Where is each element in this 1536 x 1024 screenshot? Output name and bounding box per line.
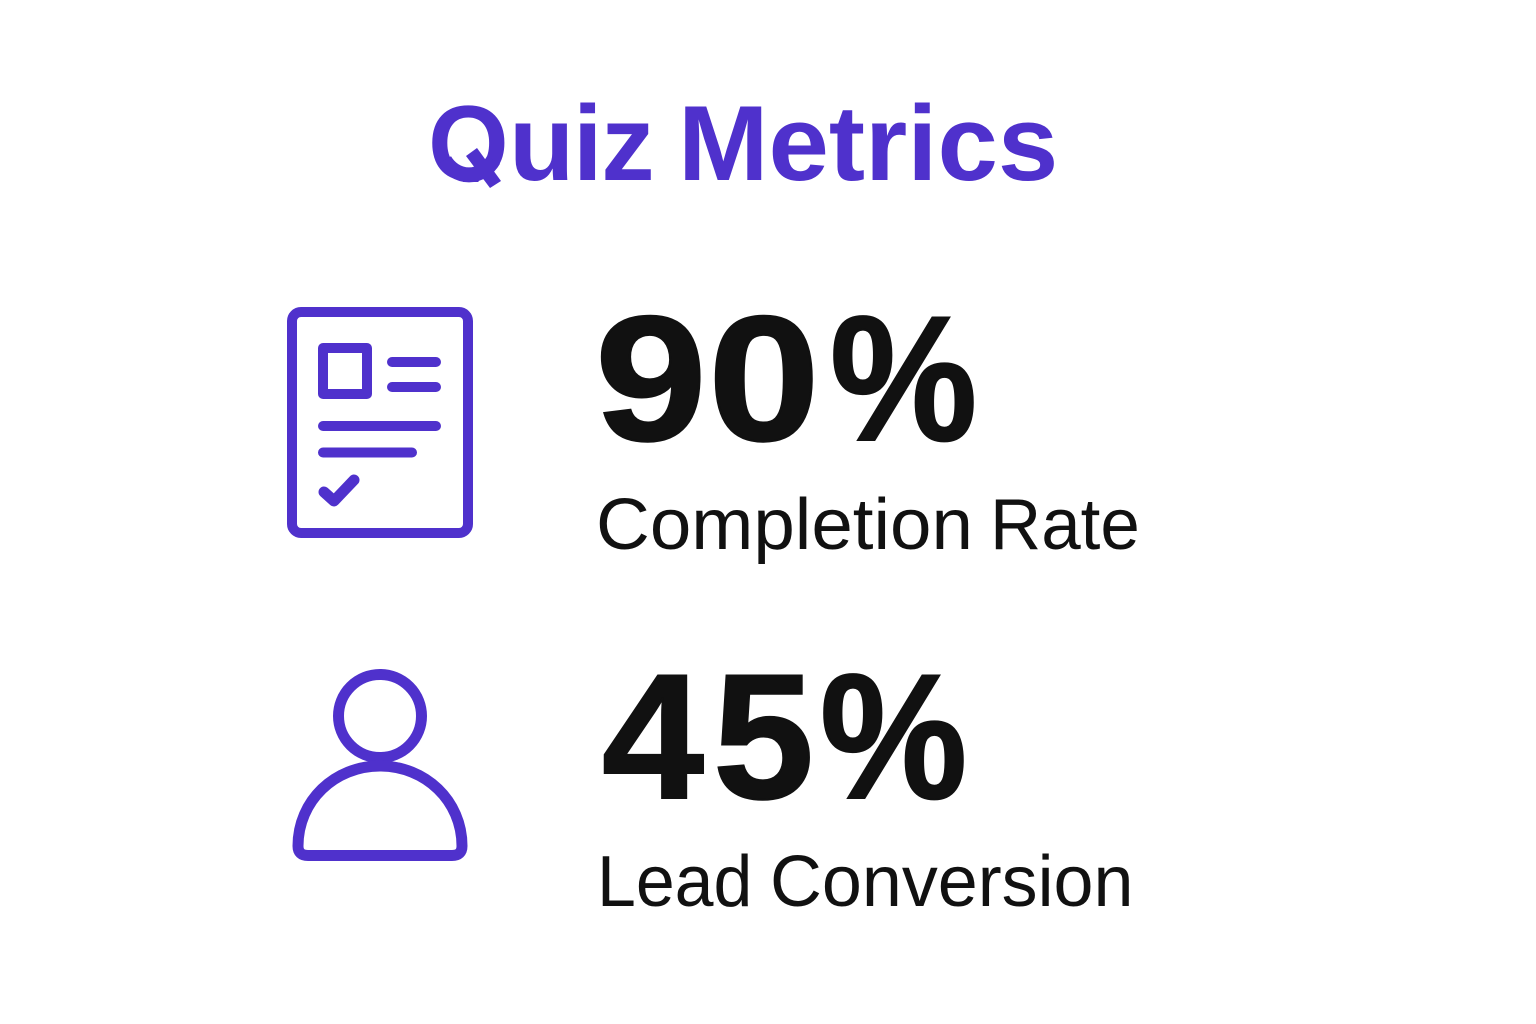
stat: lead conversion value: % [820,637,967,836]
title: uiz [509,83,653,203]
title: Q [428,83,509,203]
stat: lead conversion value: 5 [713,637,814,836]
title [428,83,1058,203]
stat: completion rate label [596,485,1140,565]
stat: completion rate value: 9 [595,279,707,478]
icon: quiz document [287,307,473,538]
stat: lead conversion value: 4 [602,637,704,836]
stat: completion rate value: % [830,279,977,478]
stat: completion rate label: Completion [596,485,973,565]
title: Metrics [678,83,1058,203]
stat: completion rate value [595,279,977,478]
stat: lead conversion value [602,637,967,836]
icon: person [292,669,468,861]
stat: completion rate value: 0 [708,279,820,478]
stat: lead conversion label: Conversion [770,842,1133,922]
stat: lead conversion label: Lead [597,842,752,922]
stat: completion rate label: Rate [990,485,1140,565]
stat: lead conversion label [597,842,1133,922]
